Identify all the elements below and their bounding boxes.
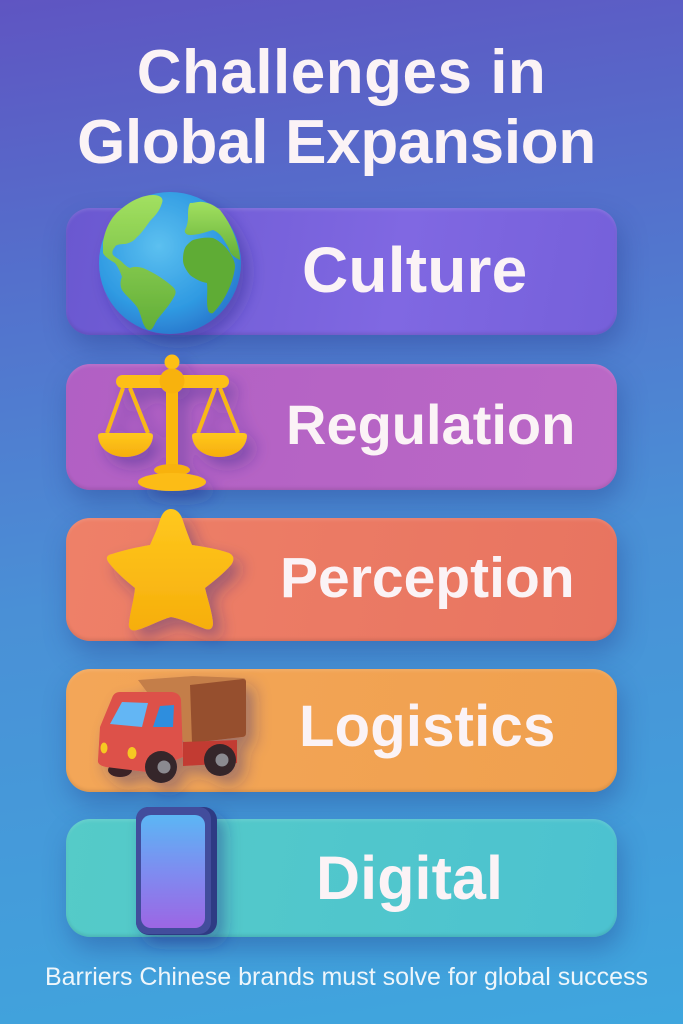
icon: truck [98,676,246,783]
panel: regulation: Regulation [286,393,575,456]
title [77,38,596,177]
panel: perception: Perception [280,546,575,610]
icon: star [107,509,233,631]
icon: globe [99,192,241,334]
icon: scales [98,354,247,491]
footer caption: Barriers Chinese brands must solve for global success [45,963,648,991]
panel: culture: Culture [302,234,527,306]
icon: smartphone [136,807,217,935]
panel: digital [66,819,617,937]
panel: logistics [66,669,617,792]
panel: regulation [66,364,617,490]
panel: digital: Digital [316,844,503,912]
panel: culture [66,208,617,335]
panel: perception [66,518,617,641]
title: Challenges in [137,38,546,107]
title: Global Expansion [77,108,596,177]
panel: logistics: Logistics [299,694,555,759]
